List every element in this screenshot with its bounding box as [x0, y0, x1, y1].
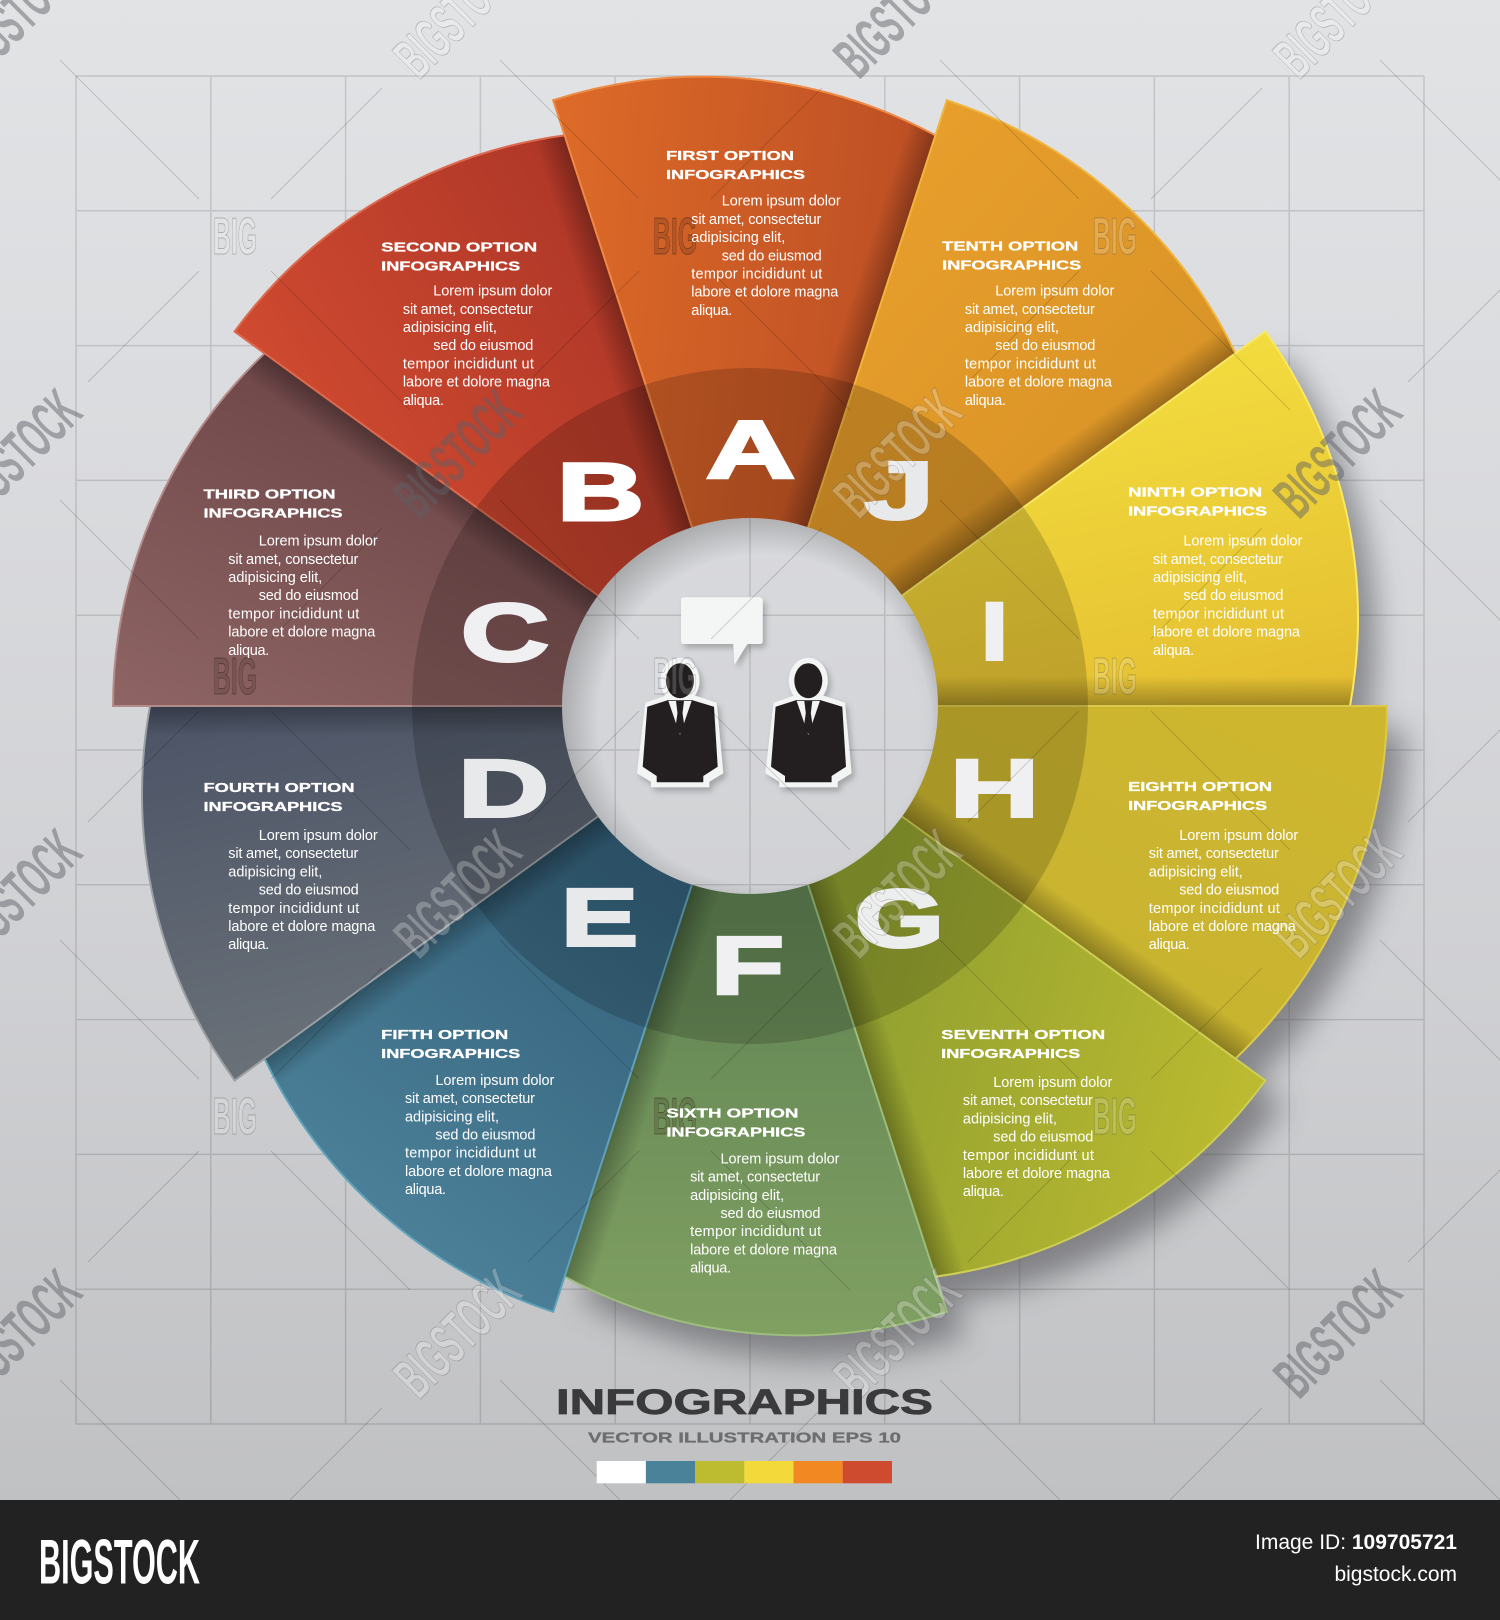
text block: tenth option: aliqua. — [965, 393, 1006, 409]
heading: fourth option: INFOGRAPHICS — [204, 799, 343, 814]
heading: sixth option — [666, 1105, 806, 1139]
heading: seventh option: SEVENTH OPTION — [941, 1027, 1105, 1042]
watermarks: BIGSTOCK — [822, 1258, 974, 1410]
wheel drop shadow — [583, 356, 1405, 1359]
text block: fifth option: tempor incididunt ut — [405, 1146, 536, 1162]
watermarks: BIG — [213, 208, 257, 266]
segment G: seventh option — [808, 816, 1265, 1277]
text block: eighth option — [1149, 828, 1298, 953]
text block: first option: tempor incididunt ut — [691, 266, 822, 282]
watermarks: BIG — [653, 648, 697, 706]
heading: second option — [381, 240, 537, 274]
text block: third option: sit amet, consectetur — [228, 552, 358, 568]
colour palette strip — [597, 1461, 892, 1483]
title: INFOGRAPHICS — [556, 1383, 933, 1422]
text block: third option: adipisicing elit, — [228, 570, 322, 586]
text block: fourth option: sit amet, consectetur — [228, 846, 358, 862]
heading: fourth option — [204, 780, 354, 814]
text block: seventh option — [963, 1075, 1112, 1200]
segment E: fifth option — [265, 816, 692, 1312]
heading: second option: INFOGRAPHICS — [381, 259, 521, 274]
segment J: tenth option — [808, 100, 1235, 596]
text block: first option: Lorem ipsum dolor — [722, 194, 841, 210]
heading: first option: INFOGRAPHICS — [666, 167, 805, 182]
text block: sixth option — [690, 1151, 840, 1277]
text block: third option: tempor incididunt ut — [228, 606, 359, 622]
text block: first option: labore et dolore magna — [691, 285, 839, 301]
heading: fifth option: INFOGRAPHICS — [381, 1046, 521, 1061]
text block: second option: Lorem ipsum dolor — [433, 284, 552, 300]
heading: third option: INFOGRAPHICS — [204, 506, 343, 521]
text block: ninth option: tempor incididunt ut — [1153, 606, 1284, 622]
text block: sixth option: sit amet, consectetur — [690, 1170, 820, 1186]
text block: third option: Lorem ipsum dolor — [259, 534, 378, 550]
text block: sixth option: Lorem ipsum dolor — [720, 1151, 840, 1167]
icon: left businessman — [637, 658, 723, 787]
text block: fifth option: sed do eiusmod — [435, 1128, 535, 1144]
watermarks: BIGSTOCK — [822, 818, 974, 970]
text block: seventh option: aliqua. — [963, 1184, 1004, 1200]
segment B: second option — [235, 135, 692, 596]
text block: eighth option: Lorem ipsum dolor — [1179, 828, 1298, 844]
text block: third option: labore et dolore magna — [228, 625, 376, 641]
heading: eighth option: INFOGRAPHICS — [1128, 798, 1268, 813]
text block: fifth option: labore et dolore magna — [405, 1164, 553, 1180]
heading: eighth option: EIGHTH OPTION — [1128, 779, 1272, 794]
watermarks: BIG — [1093, 208, 1137, 266]
heading: third option — [204, 487, 343, 521]
text block: seventh option: Lorem ipsum dolor — [993, 1075, 1112, 1091]
segment letters: D — [458, 744, 549, 834]
text block: second option — [403, 284, 552, 409]
text block: tenth option — [965, 284, 1114, 409]
segment letters: A — [706, 405, 795, 496]
text block: first option: sed do eiusmod — [722, 248, 822, 264]
text block: eighth option: sit amet, consectetur — [1149, 846, 1279, 862]
text block: sixth option: labore et dolore magna — [690, 1242, 838, 1258]
segment letters: E — [561, 872, 638, 964]
watermarks: BIGSTOCK — [382, 818, 534, 970]
text block: ninth option: sed do eiusmod — [1183, 588, 1283, 604]
text block: sixth option: sed do eiusmod — [720, 1206, 820, 1222]
text block: seventh option: sit amet, consectetur — [963, 1093, 1093, 1109]
text block: fifth option — [405, 1073, 555, 1198]
segment C: third option — [113, 353, 598, 706]
image id: Image ID: 109705721 — [1255, 1531, 1457, 1554]
watermarks: BIG — [213, 1088, 257, 1146]
heading: tenth option: TENTH OPTION — [942, 239, 1078, 254]
segment letters: I — [981, 586, 1008, 678]
segment I: ninth option — [902, 332, 1358, 706]
text block: fourth option: sed do eiusmod — [259, 883, 359, 899]
centre circle shading — [562, 518, 938, 894]
segment letters — [458, 405, 1039, 1012]
watermarks: BIGSTOCK — [382, 378, 534, 530]
watermarks: BIGSTOCK — [822, 378, 974, 530]
watermarks: BIGSTOCK — [382, 1258, 534, 1410]
watermarks: BIG — [1093, 1088, 1137, 1146]
heading: sixth option: SIXTH OPTION — [666, 1105, 798, 1120]
text block: fifth option: Lorem ipsum dolor — [435, 1073, 555, 1089]
heading: eighth option — [1128, 779, 1272, 813]
segment letters: J — [865, 446, 934, 536]
text block: tenth option: sit amet, consectetur — [965, 302, 1095, 318]
text block: seventh option: tempor incididunt ut — [963, 1148, 1094, 1164]
text block: seventh option: sed do eiusmod — [993, 1130, 1093, 1146]
text block: tenth option: Lorem ipsum dolor — [995, 284, 1114, 300]
text block: eighth option: tempor incididunt ut — [1149, 901, 1280, 917]
watermarks: BIG — [1093, 648, 1137, 706]
heading: sixth option: INFOGRAPHICS — [666, 1124, 806, 1139]
text block: fourth option — [228, 828, 378, 953]
text block: third option — [228, 534, 378, 659]
text block: eighth option: adipisicing elit, — [1149, 864, 1243, 880]
heading: tenth option — [942, 239, 1082, 273]
segment letters: G — [855, 874, 944, 964]
text block: ninth option: Lorem ipsum dolor — [1183, 534, 1303, 550]
text block: ninth option: labore et dolore magna — [1153, 625, 1301, 641]
heading: first option — [666, 148, 805, 182]
text block: fifth option: aliqua. — [405, 1182, 446, 1198]
text block: second option: adipisicing elit, — [403, 320, 497, 336]
inner dark ring — [412, 368, 1088, 1044]
footer site url: bigstock.com — [1334, 1563, 1457, 1586]
watermarks: BIG — [653, 1088, 697, 1146]
heading: fifth option: FIFTH OPTION — [381, 1027, 508, 1042]
heading: first option: FIRST OPTION — [666, 148, 794, 163]
text block: ninth option: adipisicing elit, — [1153, 570, 1247, 586]
heading: seventh option — [941, 1027, 1105, 1061]
text block: seventh option: labore et dolore magna — [963, 1166, 1111, 1182]
text block: second option: aliqua. — [403, 393, 444, 409]
text block: first option: aliqua. — [691, 303, 732, 319]
heading: ninth option: INFOGRAPHICS — [1128, 504, 1268, 519]
text block: eighth option: sed do eiusmod — [1179, 883, 1279, 899]
heading: seventh option: INFOGRAPHICS — [941, 1046, 1081, 1061]
text block: first option: adipisicing elit, — [691, 230, 785, 246]
heading: tenth option: INFOGRAPHICS — [942, 258, 1082, 273]
heading: fifth option — [381, 1027, 521, 1061]
text block: tenth option: adipisicing elit, — [965, 320, 1059, 336]
segment letters: H — [950, 744, 1039, 834]
watermarks: BIG — [653, 208, 697, 266]
text block: fifth option: sit amet, consectetur — [405, 1091, 535, 1107]
text block: ninth option — [1153, 534, 1303, 659]
segment F: sixth option — [565, 885, 947, 1335]
text block: fourth option: adipisicing elit, — [228, 864, 322, 880]
text block: seventh option: adipisicing elit, — [963, 1111, 1057, 1127]
segment D: fourth option — [142, 706, 598, 1080]
text block: second option: labore et dolore magna — [403, 375, 551, 391]
segment letters: B — [557, 447, 644, 538]
segment H: eighth option — [902, 706, 1387, 1059]
text block: second option: sit amet, consectetur — [403, 302, 533, 318]
icon: speech bubble — [681, 597, 763, 665]
text block: fourth option: labore et dolore magna — [228, 919, 376, 935]
text block: sixth option: adipisicing elit, — [690, 1188, 784, 1204]
text block: sixth option: tempor incididunt ut — [690, 1224, 821, 1240]
text block: eighth option: aliqua. — [1149, 937, 1190, 953]
heading: third option: THIRD OPTION — [204, 487, 336, 502]
heading: ninth option: NINTH OPTION — [1128, 485, 1262, 500]
footer bar: BIGSTOCK — [39, 1527, 200, 1597]
text block: third option: sed do eiusmod — [259, 588, 359, 604]
heading: fourth option: FOURTH OPTION — [204, 780, 354, 795]
segment letters: F — [711, 920, 784, 1012]
icon: right businessman — [765, 658, 852, 787]
text block: ninth option: sit amet, consectetur — [1153, 552, 1283, 568]
segment A: first option — [553, 77, 935, 527]
text block: first option — [691, 194, 841, 319]
footer bar — [0, 1500, 1500, 1620]
text block: second option: sed do eiusmod — [433, 338, 533, 354]
text block: eighth option: labore et dolore magna — [1149, 919, 1297, 935]
segment letters: C — [461, 588, 549, 678]
text block: fifth option: adipisicing elit, — [405, 1109, 499, 1125]
text block: ninth option: aliqua. — [1153, 643, 1194, 659]
text block: second option: tempor incididunt ut — [403, 356, 534, 372]
text block: tenth option: sed do eiusmod — [995, 338, 1095, 354]
text block: fourth option: tempor incididunt ut — [228, 901, 359, 917]
text block: third option: aliqua. — [228, 643, 269, 659]
text block: tenth option: tempor incididunt ut — [965, 356, 1096, 372]
watermarks: BIG — [213, 648, 257, 706]
text block: sixth option: aliqua. — [690, 1261, 731, 1277]
text block: fourth option: Lorem ipsum dolor — [259, 828, 378, 844]
heading: ninth option — [1128, 485, 1268, 519]
text block: fourth option: aliqua. — [228, 937, 269, 953]
heading: second option: SECOND OPTION — [381, 240, 537, 255]
segment B overlap on top of C — [233, 198, 640, 596]
text block: tenth option: labore et dolore magna — [965, 375, 1113, 391]
text block: first option: sit amet, consectetur — [691, 212, 821, 228]
subtitle: VECTOR ILLUSTRATION EPS 10 — [588, 1430, 901, 1446]
